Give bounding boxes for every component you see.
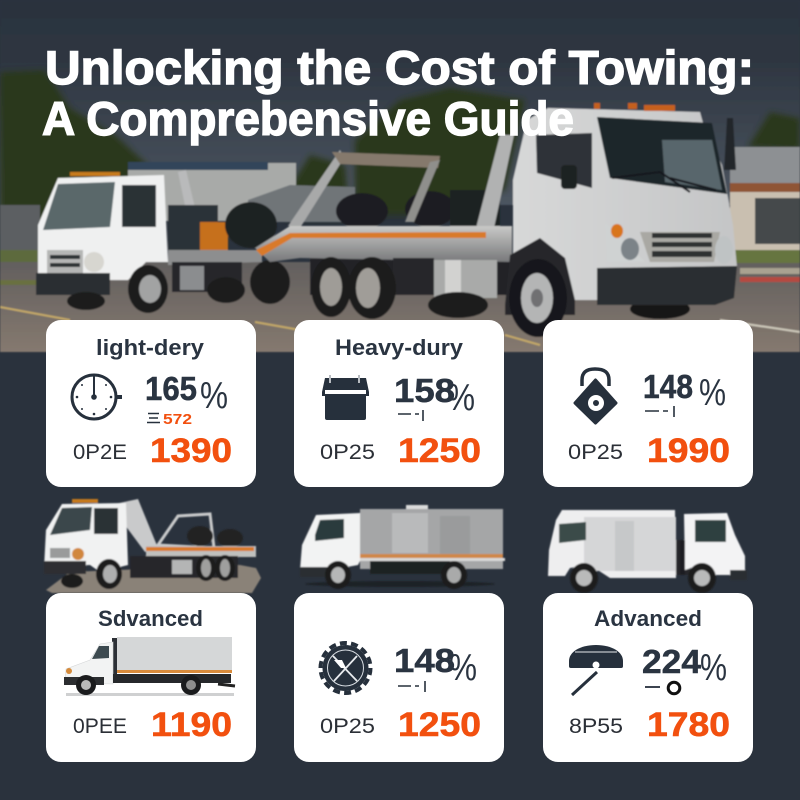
icon: battery bbox=[322, 375, 369, 420]
price: 1990 bbox=[647, 432, 730, 470]
panel: padlock card: % bbox=[699, 372, 726, 414]
truck: white van truck bbox=[548, 510, 747, 593]
statistic: 148 bbox=[394, 642, 455, 679]
heading: Heavy-dury bbox=[335, 335, 464, 360]
panel: standard box truck card bbox=[46, 593, 256, 762]
price: 1250 bbox=[398, 706, 481, 744]
code label: 0PEE bbox=[73, 715, 127, 738]
price: 1250 bbox=[398, 432, 481, 470]
panel: padlock card bbox=[543, 320, 753, 487]
sub marks bbox=[645, 682, 680, 694]
panel: advanced card bbox=[543, 593, 753, 762]
parked car bbox=[248, 185, 355, 222]
icon: light bar on boom bbox=[569, 645, 623, 695]
heading: Advanced bbox=[594, 606, 702, 631]
sub value: 572 bbox=[163, 411, 192, 428]
panel: heavy-duty card: % bbox=[447, 377, 475, 419]
price: 1780 bbox=[647, 706, 730, 744]
code label: 8P55 bbox=[569, 715, 623, 738]
statistic: 158 bbox=[394, 372, 455, 409]
icon: padlock bbox=[575, 369, 616, 423]
panel: gear badge card bbox=[294, 593, 504, 762]
background trees bbox=[0, 70, 800, 235]
sub marks bbox=[645, 406, 674, 417]
heading: Sdvanced bbox=[98, 606, 203, 631]
price: 1390 bbox=[150, 432, 232, 470]
truck: grey box truck bbox=[300, 505, 505, 589]
title bbox=[42, 41, 754, 145]
panel: light-duty card: % bbox=[200, 375, 228, 417]
code label: 0P2E bbox=[73, 441, 127, 464]
tire on small truck bed bbox=[225, 202, 277, 248]
panel: heavy-duty card bbox=[294, 320, 504, 487]
code label: 0P25 bbox=[320, 715, 375, 738]
hero photo: towing trucks in a parking lot bbox=[0, 0, 800, 352]
icon: gear badge with crossed tools bbox=[320, 643, 370, 693]
heading: light-dery bbox=[96, 335, 205, 360]
price: 1190 bbox=[151, 706, 232, 744]
road bbox=[0, 262, 800, 352]
icon: stopwatch bbox=[72, 375, 122, 419]
sub value bbox=[147, 411, 192, 428]
statistic: 224 bbox=[642, 643, 702, 680]
code label: 0P25 bbox=[320, 441, 375, 464]
sub marks bbox=[398, 410, 423, 421]
sky bbox=[0, 0, 800, 205]
sub marks bbox=[398, 681, 425, 692]
background buildings bbox=[128, 163, 296, 221]
panel: advanced card: % bbox=[700, 647, 727, 689]
panel: light-duty card bbox=[46, 320, 256, 487]
title: A Comprebensive Guide bbox=[42, 92, 574, 145]
truck: flatbed tow truck with road patch bbox=[44, 499, 261, 593]
large tow truck bbox=[255, 103, 737, 337]
small tow truck bbox=[36, 170, 290, 313]
code label: 0P25 bbox=[568, 441, 623, 464]
panel: gear badge card: % bbox=[449, 647, 477, 689]
truck illustration bbox=[64, 637, 235, 696]
statistic: 165 bbox=[145, 370, 197, 407]
statistic: 148 bbox=[643, 368, 693, 405]
title: Unlocking the Cost of Towing: bbox=[45, 41, 754, 94]
